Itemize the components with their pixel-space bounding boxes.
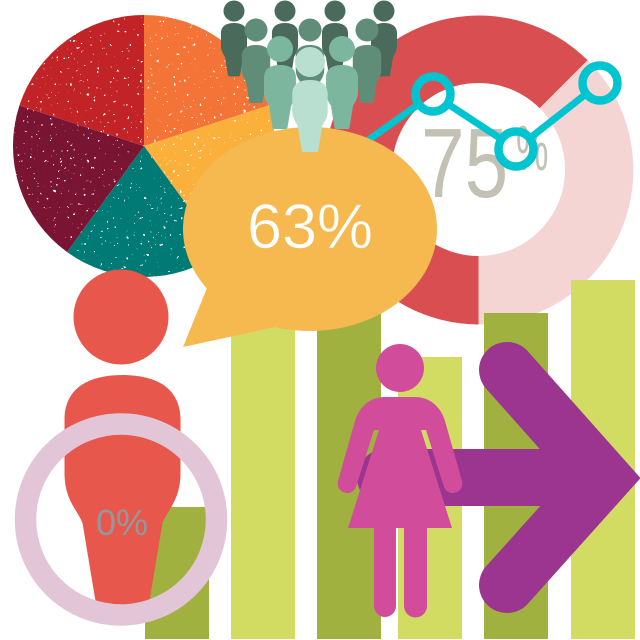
line chart with circle markers: [350, 66, 618, 166]
pie chart: [13, 15, 275, 277]
speech bubble: [183, 127, 437, 347]
icon: woman: [338, 344, 462, 618]
icon: large coral person: [64, 270, 180, 605]
arrow: [386, 370, 603, 585]
bubble label 63%: 63%: [247, 192, 373, 262]
ring label 0%: 0%: [96, 502, 148, 543]
third row people: [264, 36, 358, 129]
front person: [292, 47, 328, 152]
pie slice: teal: [67, 146, 221, 277]
pie slice: maroon: [13, 106, 144, 252]
donut chart 75%: [324, 16, 633, 325]
pie slice: orange: [144, 15, 269, 146]
donut label 75%: [421, 109, 548, 218]
back row people: [221, 0, 397, 76]
bar chart: [145, 280, 635, 639]
icon: crowd of people: [221, 0, 397, 152]
donut label 75%: %: [516, 113, 548, 185]
progress ring 0%: [26, 424, 216, 615]
donut segment: light: [478, 60, 633, 325]
donut segment: dark: [324, 16, 588, 324]
pie slice: red: [19, 15, 144, 146]
donut label 75%: 75: [421, 109, 508, 218]
pie slice: yellow: [144, 106, 275, 252]
middle row people: [242, 18, 381, 103]
